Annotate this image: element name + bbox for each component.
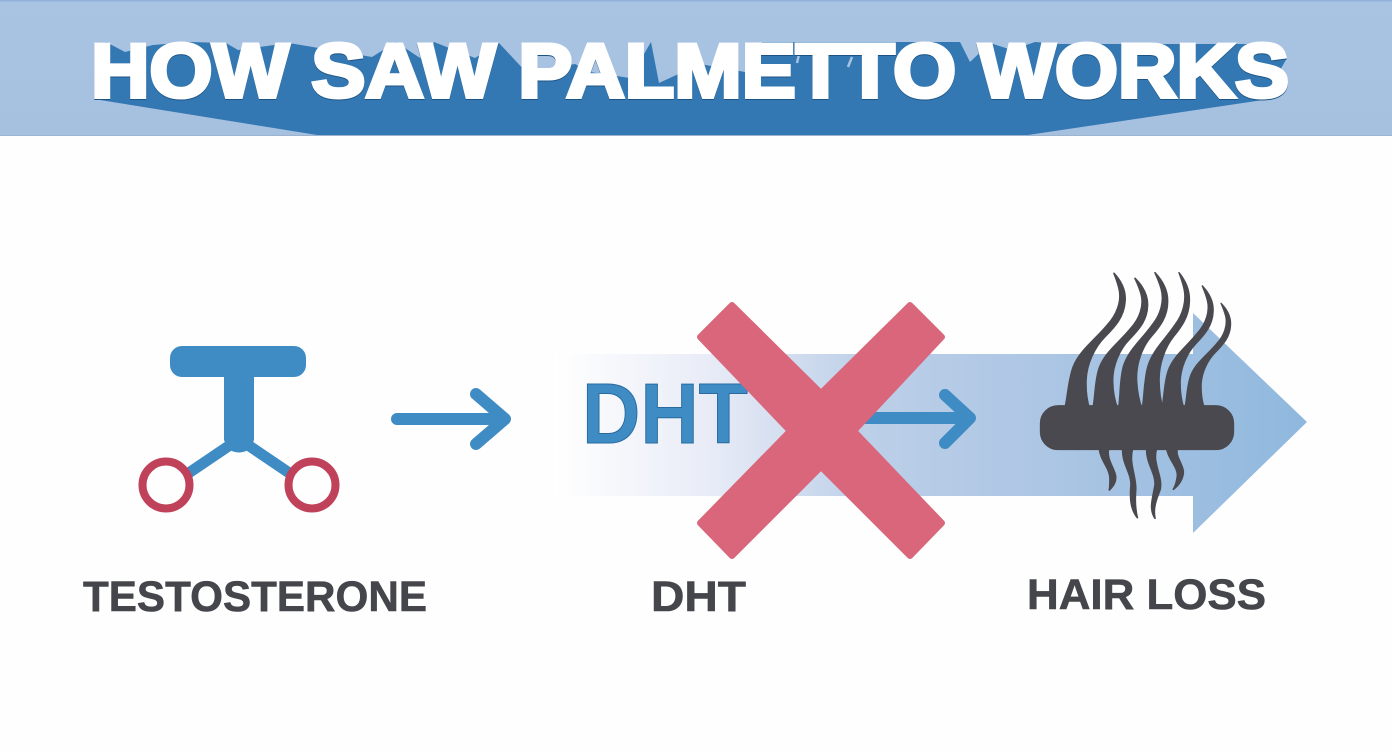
- header banner: [0, 0, 1392, 136]
- label: testosterone: TESTOSTERONE: [83, 573, 427, 621]
- follicle roots: [1099, 448, 1183, 518]
- large background arrow: [555, 313, 1307, 533]
- label: hair loss: HAIR LOSS: [1027, 571, 1266, 619]
- icon: red X block: [700, 305, 942, 556]
- label: DHT: DHT: [651, 573, 746, 621]
- title: HOW SAW PALMETTO WORKS: [91, 29, 1289, 114]
- banner ribbon shape: [94, 42, 1287, 135]
- highlight slivers: [797, 50, 905, 70]
- icon: testosterone molecule: [142, 346, 336, 508]
- arrow: DHT to hair loss: [850, 395, 970, 443]
- big DHT text: DHT: [582, 367, 748, 462]
- arrow: testosterone to DHT: [397, 394, 505, 444]
- icon: hair follicle: [1041, 273, 1233, 518]
